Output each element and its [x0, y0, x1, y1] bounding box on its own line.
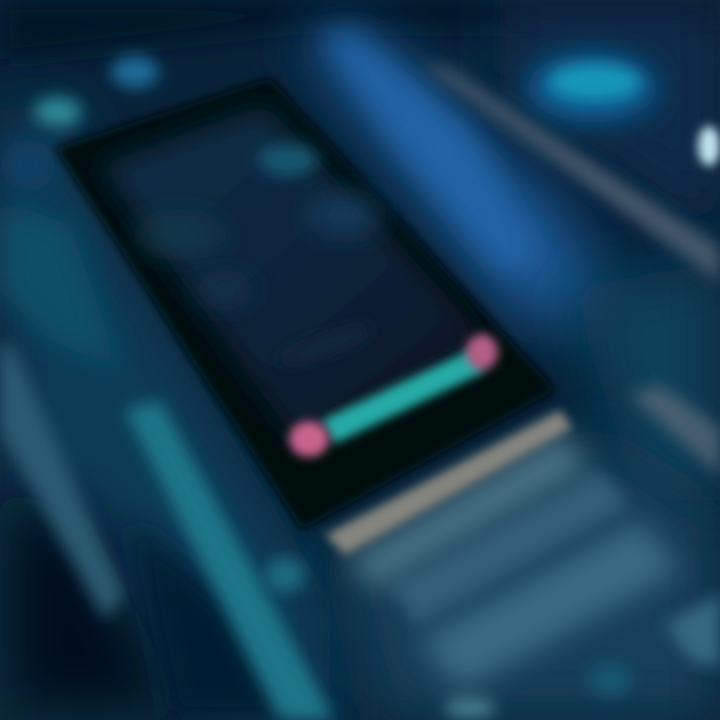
pink bar end, right	[466, 334, 498, 370]
teal progress bar	[322, 348, 484, 444]
grey diagonal line, top right	[425, 66, 720, 282]
phone tan edge	[325, 410, 572, 555]
phone black body	[55, 78, 556, 530]
phone screen	[100, 105, 490, 440]
glowing cyan ellipse, top right	[526, 54, 658, 122]
teal diagonal line, lower left	[125, 400, 335, 720]
lower right stripes	[265, 385, 720, 718]
smartphone	[55, 78, 572, 555]
pink bar end, left	[289, 421, 329, 457]
grey diagonal line, far left	[0, 345, 125, 620]
white light spot, right edge	[698, 126, 720, 166]
screen content glow	[135, 144, 381, 370]
